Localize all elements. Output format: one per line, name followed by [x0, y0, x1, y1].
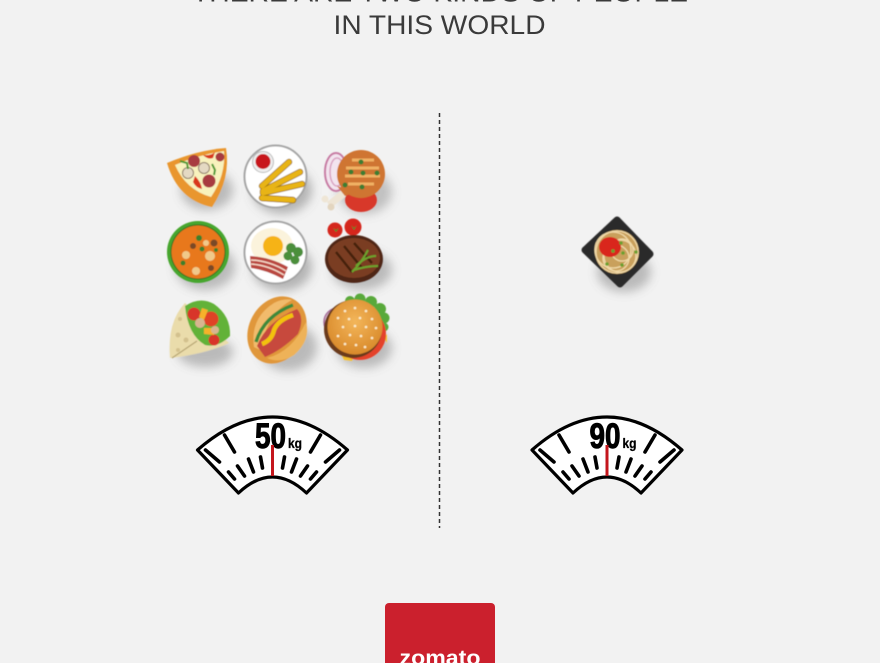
icon: spaghetti plate — [585, 220, 651, 292]
icon: grilled chicken — [322, 150, 392, 214]
icon: wrap — [170, 300, 233, 367]
icon: egg and bacon plate — [244, 222, 312, 291]
reading: 50 kg: 50 — [255, 417, 286, 456]
needle — [606, 445, 608, 476]
food grid: many dishes — [167, 146, 392, 374]
scale dial: 90 kg — [532, 417, 682, 493]
title: IN THIS WORLD — [334, 10, 546, 40]
icon: fries plate — [244, 146, 312, 214]
reading: 90 kg: kg — [622, 435, 636, 451]
icon: steak with tomatoes — [325, 218, 392, 290]
dashed divider — [438, 113, 440, 528]
zomato logo — [385, 603, 495, 663]
scale dial: 50 kg — [198, 417, 348, 493]
title — [192, 0, 688, 40]
icon: soup bowl — [167, 221, 235, 290]
reading: 50 kg: kg — [288, 435, 302, 451]
needle — [271, 445, 274, 476]
icon: hot dog — [236, 286, 318, 374]
reading: 90 kg: 90 — [590, 417, 620, 456]
icon: pizza slice — [167, 148, 233, 210]
icon: burger — [324, 294, 392, 368]
